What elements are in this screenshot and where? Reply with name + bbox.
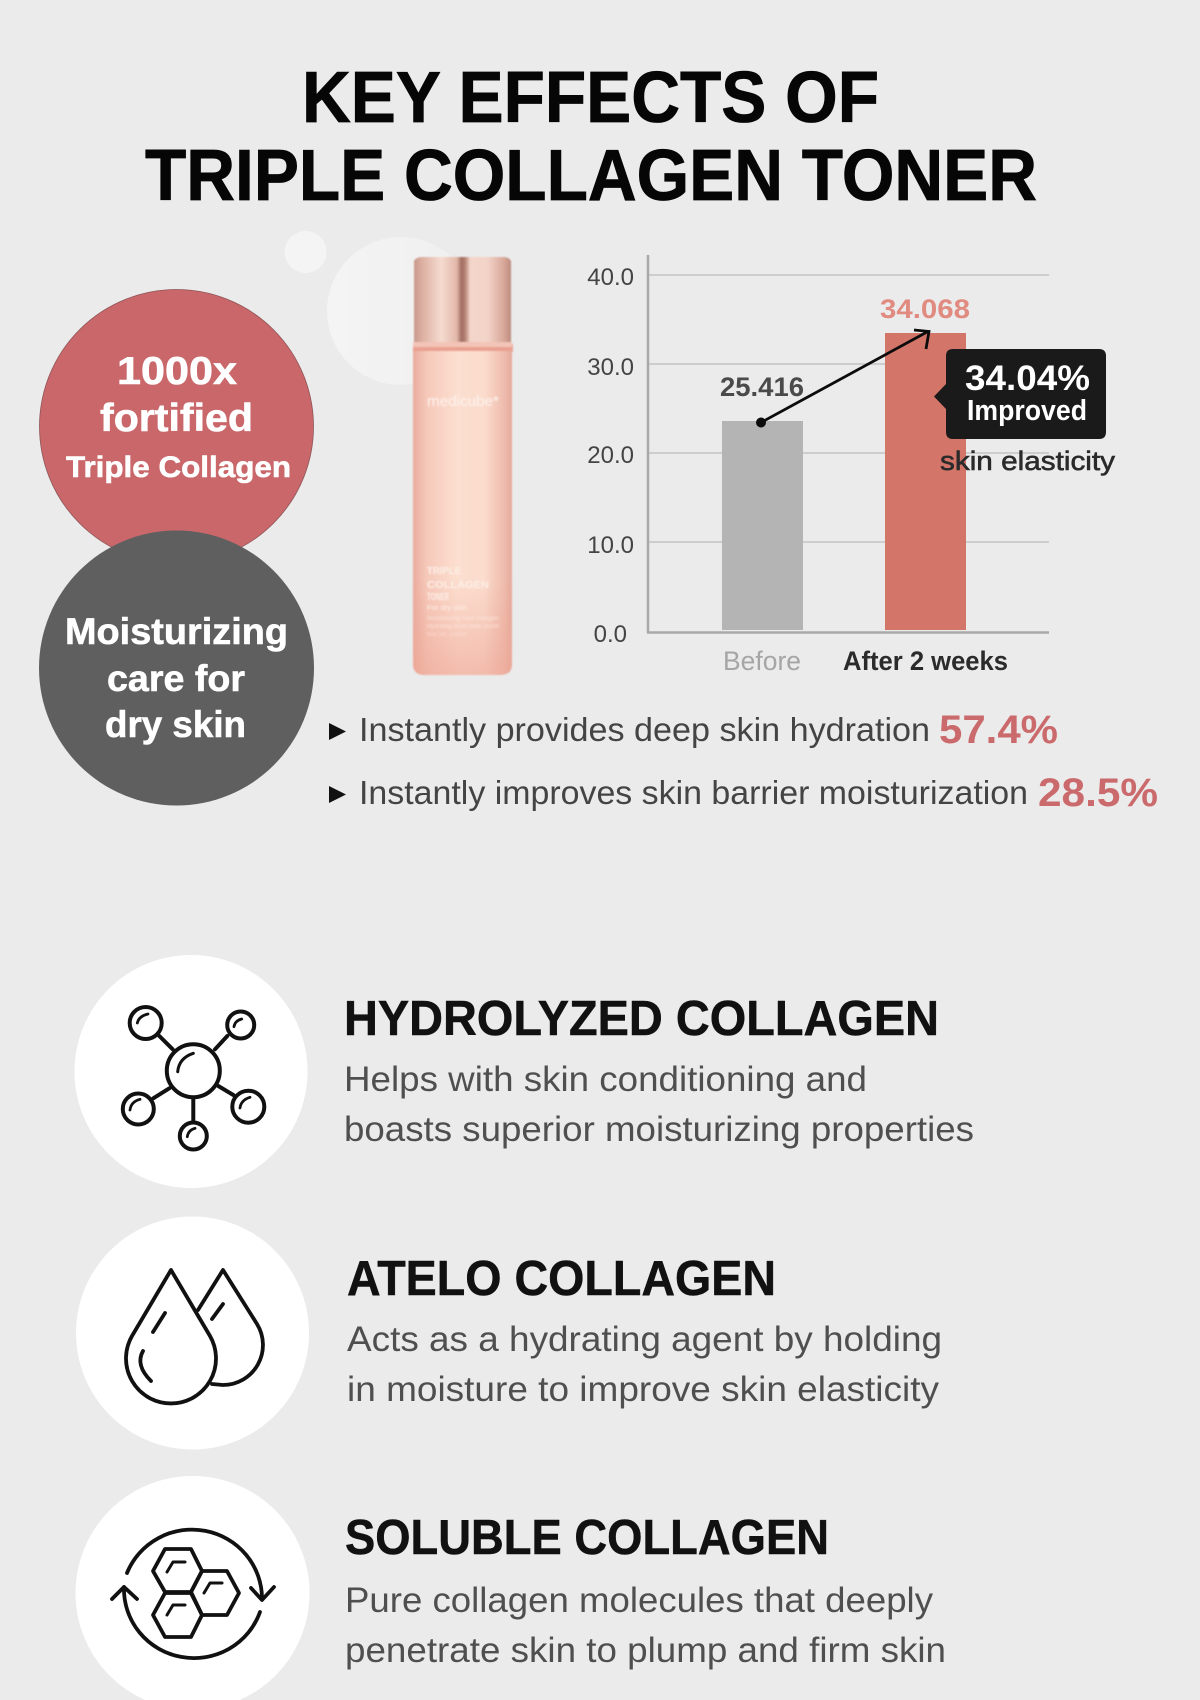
icon: molecule [123, 1007, 264, 1150]
title: TRIPLE COLLAGEN TONER [145, 136, 1037, 216]
bar: before [722, 421, 803, 630]
badge: Moisturizing care for dry skin: dry skin [105, 704, 246, 745]
icon: hexagons with circular arrows [112, 1530, 274, 1658]
ingredient: atelo collagen [76, 1216, 942, 1450]
description: Helps with skin conditioning and [344, 1060, 867, 1099]
badge: 1000x fortified Triple Collagen: fortified [100, 397, 253, 440]
description: Pure collagen molecules that deeply [345, 1581, 934, 1620]
stat: skin barrier moisturization: 28.5% [1038, 771, 1158, 815]
stat: deep skin hydration [329, 708, 1058, 752]
callout: 34.04% improved [934, 349, 1106, 439]
description: in moisture to improve skin elasticity [347, 1370, 940, 1409]
product: toner bottle: TONER [427, 592, 449, 603]
badge: Moisturizing care for dry skin: Moisturizing [65, 611, 288, 652]
product: toner bottle [413, 257, 513, 675]
ingredient: hydrolyzed collagen [74, 955, 974, 1188]
x axis label: before: Before [723, 646, 801, 676]
product: toner bottle: Net wt. 150ml [427, 632, 467, 638]
value: before: 25.416 [720, 372, 804, 402]
description: boasts superior moisturizing properties [344, 1110, 974, 1149]
y axis labels: 40.0 [587, 264, 634, 291]
badge: 1000x fortified Triple Collagen [40, 290, 314, 564]
stat: deep skin hydration: 57.4% [939, 708, 1058, 752]
stat: skin barrier moisturization [329, 771, 1158, 815]
icon: water drops [126, 1270, 263, 1403]
product: toner bottle: For dry skin [427, 605, 467, 612]
arrow: growth [756, 330, 929, 428]
product: toner bottle: medicube* [427, 393, 499, 410]
product: toner bottle: COLLAGEN [427, 580, 489, 591]
badge: 1000x fortified Triple Collagen: Triple Collagen [66, 451, 291, 484]
decorative glow circles [284, 231, 475, 385]
badge: Moisturizing care for dry skin [39, 530, 314, 806]
bar chart: skin elasticity [587, 255, 1116, 676]
stat: deep skin hydration: Instantly provides deep skin hydration [359, 711, 930, 748]
description [345, 1581, 946, 1670]
description: penetrate skin to plump and firm skin [345, 1631, 946, 1670]
heading: HYDROLYZED COLLAGEN [344, 992, 939, 1046]
ingredient: soluble collagen [76, 1476, 946, 1700]
description: Acts as a hydrating agent by holding [347, 1320, 942, 1359]
value: after: 34.068 [880, 294, 970, 324]
y axis labels: 10.0 [587, 532, 634, 559]
title: KEY EFFECTS OF [302, 58, 879, 138]
bar: after 2 weeks [885, 333, 966, 630]
y axis labels: 0.0 [594, 621, 627, 648]
x axis label: after 2 weeks: After 2 weeks [843, 646, 1008, 676]
heading: SOLUBLE COLLAGEN [345, 1511, 829, 1565]
callout: 34.04% improved: 34.04% [965, 359, 1090, 398]
chart caption: skin elasticity [940, 446, 1116, 476]
badge: 1000x fortified Triple Collagen: 1000x [117, 350, 237, 393]
product: toner bottle: Hydrating facial toner 150ml [427, 624, 499, 630]
y axis labels [587, 264, 634, 648]
heading: ATELO COLLAGEN [347, 1252, 776, 1306]
y axis labels: 20.0 [587, 442, 634, 469]
stat: skin barrier moisturization: Instantly improves skin barrier moisturization [359, 774, 1028, 811]
description [344, 1060, 974, 1149]
y axis labels: 30.0 [587, 354, 634, 381]
badge: Moisturizing care for dry skin: care for [107, 658, 245, 699]
callout: 34.04% improved: Improved [967, 395, 1087, 427]
description [347, 1320, 942, 1409]
product: toner bottle: TRIPLE [427, 566, 461, 577]
product: toner bottle: Moisturizing care collagen [427, 616, 499, 622]
title [145, 58, 1037, 216]
